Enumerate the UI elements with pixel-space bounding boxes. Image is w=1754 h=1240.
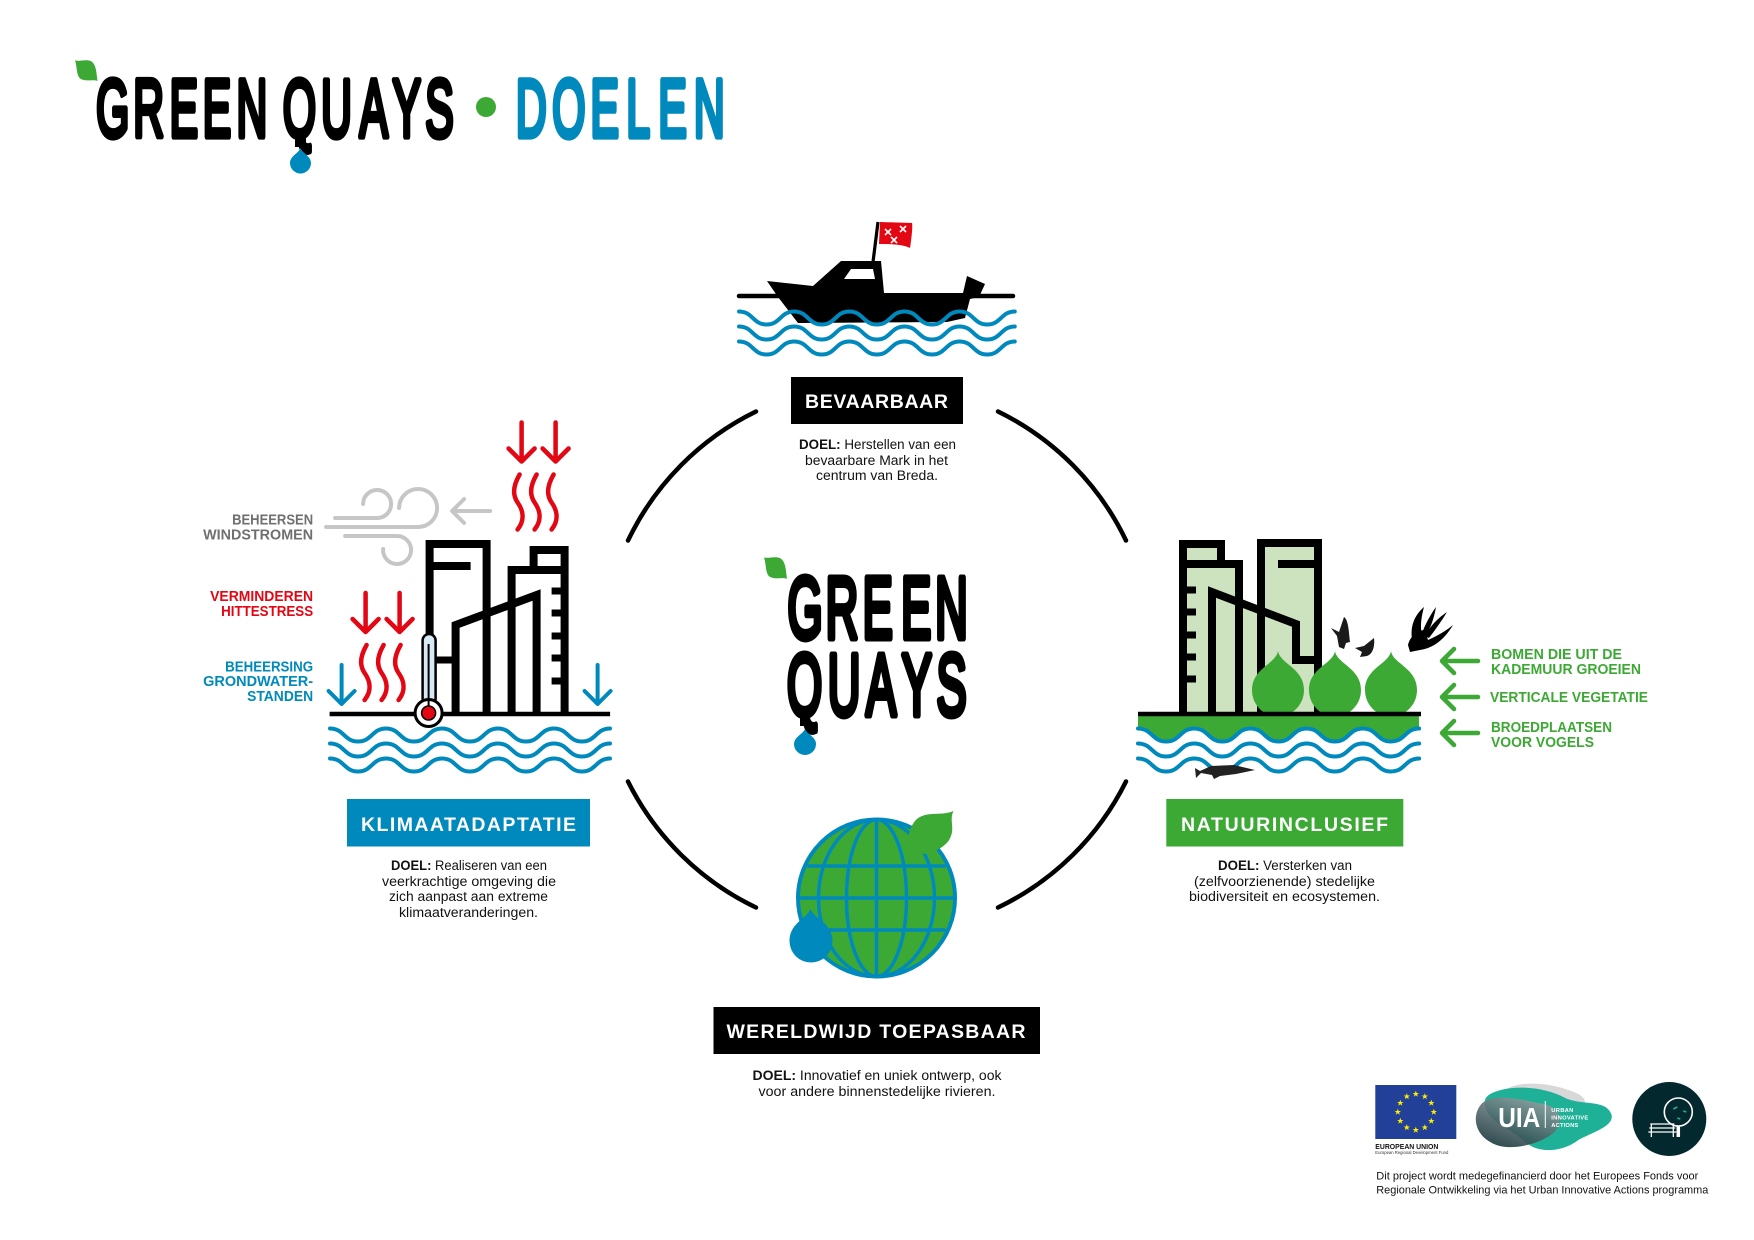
panel: klimaatadaptatie [203,422,611,920]
label: broedplaatsen voor vogels [1491,720,1612,751]
label: verminderen hittestress: HITTESTRESS [221,604,313,620]
text: doel bevaarbaar [799,437,956,483]
heading: klimaatadaptatie [347,799,590,846]
title text: Green Quays: GREEN [96,62,267,154]
label: bomen die uit de kademuur groeien: BOMEN DIE UIT DE [1491,647,1622,663]
heading: natuurinclusief [1166,799,1403,846]
text: doel klimaatadaptatie [382,858,556,920]
text: funding note [1376,1170,1709,1196]
label: beheersing grondwaterstanden [203,660,313,705]
title text: Green Quays: QUAYS [283,62,454,154]
panel: bevaarbaar [739,222,1015,483]
title text: Doelen: DOELEN [516,62,725,154]
icon: water waves [1138,728,1419,772]
text: green quays: QUAYS [787,636,967,734]
icon: trees [1252,651,1417,718]
icon: title Q tail [295,137,306,147]
label: verminderen hittestress: VERMINDEREN [210,589,313,605]
text: funding note: Regionale Ontwikkeling via het Urban Innovative Actions programma [1376,1184,1709,1196]
logo: park circle [1632,1082,1706,1156]
icon: center drop [794,729,816,755]
icon: water waves [330,728,610,772]
label: beheersing grondwaterstanden: BEHEERSING [225,660,313,676]
icon: title water drop [290,148,311,174]
icon: groundwater arrows [329,665,611,704]
heading: bevaarbaar: BEVAARBAAR [805,391,948,413]
logo: UIA: UIA [1498,1102,1540,1133]
text: green quays [787,559,968,734]
label: beheersen windstromen: BEHEERSEN [232,512,313,528]
icon: swallow [1408,607,1453,652]
text: doel klimaatadaptatie: zich aanpast aan extreme [389,889,548,904]
text: doel klimaatadaptatie: veerkrachtige omgeving die [382,874,556,889]
heading: bevaarbaar [791,377,963,424]
text: doel bevaarbaar: centrum van Breda. [816,468,938,483]
icon: thermometer [415,634,442,726]
title text: Green Quays [96,62,454,154]
icon: butterfly one [1331,617,1350,649]
icon: quay with green band [1138,714,1421,742]
heading: natuurinclusief: NATUURINCLUSIEF [1181,814,1388,836]
icon: butterfly two [1355,638,1374,657]
connecting circle arcs [628,412,1126,908]
logo: UIA [1476,1084,1612,1150]
icon: globe leaf [908,811,954,854]
text: doel natuurinclusief: DOEL: Versterken van [1218,858,1352,873]
icon: boat on water [739,222,1015,354]
label: broedplaatsen voor vogels: BROEDPLAATSEN [1491,720,1612,736]
icon: city buildings [330,544,610,716]
logo: european union flag: European Regional Development Fund [1375,1150,1449,1155]
icon: title separator dot [476,97,496,117]
icon: wind [326,489,490,564]
text: doel wereldwijd: DOEL: Innovatief en uniek ontwerp, ook [752,1068,1002,1083]
text: doel wereldwijd: voor andere binnenstedelijke rivieren. [758,1084,996,1099]
arrows: green pointing to labels [1442,649,1478,745]
heading: klimaatadaptatie: KLIMAATADAPTATIE [361,814,576,836]
title: Green Quays Doelen [75,60,725,174]
icon: title leaf [75,60,98,81]
logo: european union flag [1375,1085,1456,1155]
label: beheersing grondwaterstanden: GRONDWATER- [203,674,313,690]
icon: upper heat arrows [509,422,569,530]
label: verminderen hittestress [210,589,313,620]
text: doel natuurinclusief [1189,858,1380,904]
icon: globe [798,820,955,976]
logo: UIA: INNOVATIVE [1551,1116,1588,1122]
text: doel wereldwijd [752,1068,1002,1099]
icon: green city [1183,543,1318,716]
text: doel klimaatadaptatie: klimaatveranderingen. [399,905,538,920]
logo: european union flag: EUROPEAN UNION [1375,1142,1438,1151]
text: doel bevaarbaar: DOEL: Herstellen van een [799,437,956,452]
text: green quays: GREEN [787,559,968,657]
icon: center Q tail [800,717,810,726]
icon: fish [1195,765,1255,779]
label: bomen die uit de kademuur groeien: KADEMUUR GROEIEN [1491,662,1641,678]
label: bomen die uit de kademuur groeien [1491,647,1641,678]
label: beheersen windstromen: WINDSTROMEN [203,528,313,544]
heading: wereldwijd toepasbaar [714,1007,1040,1054]
logo: UIA: ACTIONS [1551,1123,1578,1129]
label: verticale vegetatie: VERTICALE VEGETATIE [1490,690,1648,706]
icon: lower heat arrows [353,593,413,700]
center logo [764,557,968,755]
panel: wereldwijd toepasbaar [714,811,1040,1099]
icon: center leaf [764,557,787,579]
partner logos [1375,1082,1709,1196]
label: beheersen windstromen [203,512,313,544]
text: doel klimaatadaptatie: DOEL: Realiseren van een [391,858,547,873]
panel: natuurinclusief [1138,543,1648,904]
text: doel bevaarbaar: bevaarbare Mark in het [805,453,948,468]
text: funding note: Dit project wordt medegefinancierd door het Europees Fonds voor [1376,1170,1699,1182]
logo: UIA: URBAN [1551,1108,1573,1114]
text: doel natuurinclusief: biodiversiteit en ecosystemen. [1189,889,1380,904]
text: doel natuurinclusief: (zelfvoorzienende) stedelijke [1194,874,1375,889]
heading: wereldwijd toepasbaar: WERELDWIJD TOEPASBAAR [726,1021,1026,1043]
label: broedplaatsen voor vogels: VOOR VOGELS [1491,735,1594,751]
label: beheersing grondwaterstanden: STANDEN [247,689,313,705]
icon: globe drop [790,909,832,962]
